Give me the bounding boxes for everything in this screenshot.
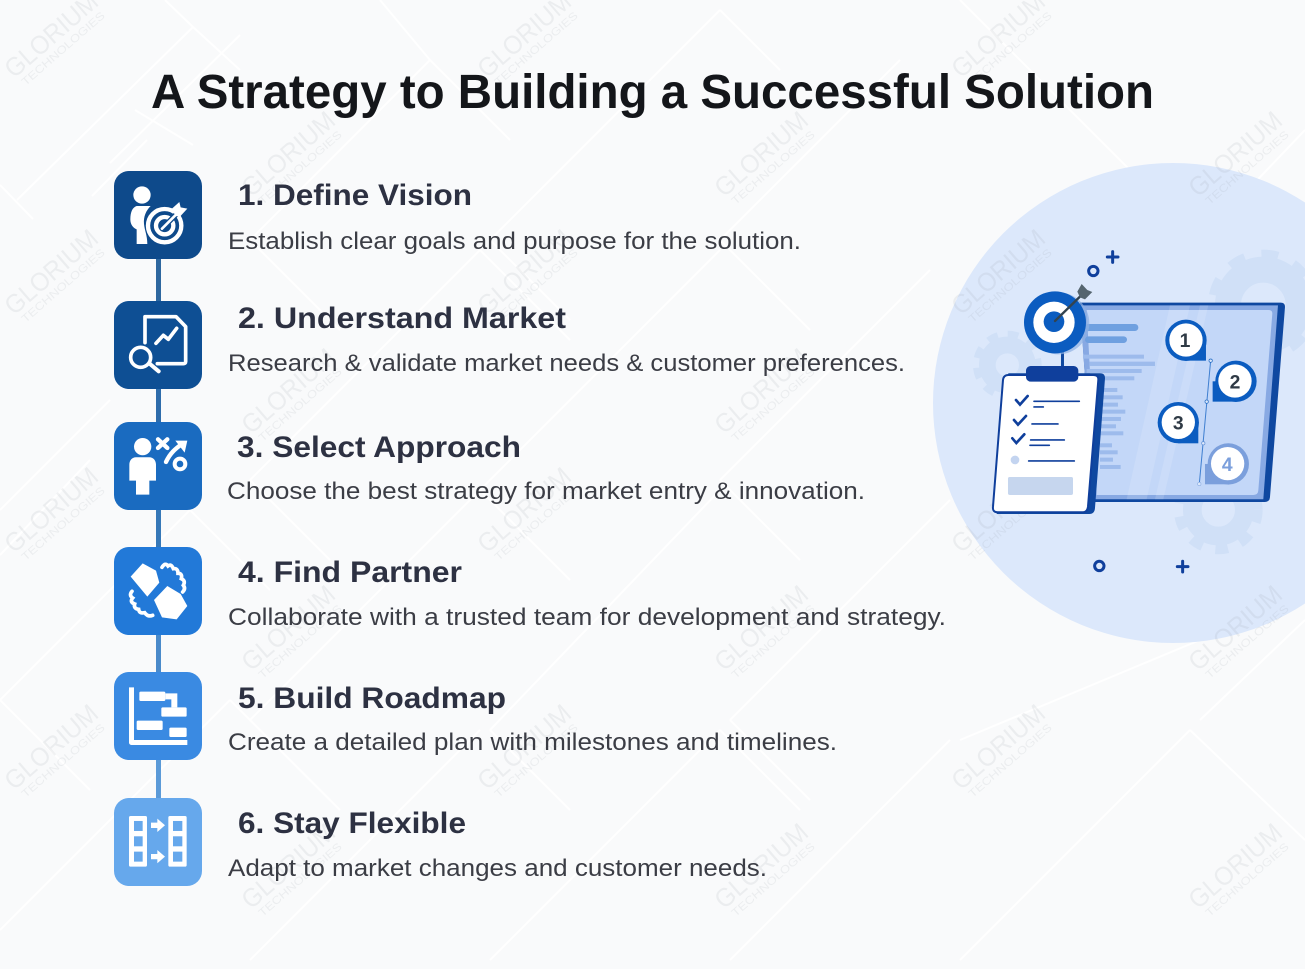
heading: 6. Stay Flexible bbox=[238, 807, 466, 840]
watermarks: GLORIUM bbox=[708, 105, 814, 203]
watermarks: TECHNOLOGIES bbox=[730, 129, 818, 207]
watermarks: TECHNOLOGIES bbox=[967, 247, 1055, 325]
icon: columns with arrows bbox=[114, 798, 202, 886]
pin 2: 2 bbox=[1230, 372, 1240, 393]
step 1: define vision bbox=[114, 171, 801, 259]
watermarks: TECHNOLOGIES bbox=[493, 10, 581, 88]
watermarks: GLORIUM bbox=[945, 223, 1051, 321]
description: Create a detailed plan with milestones and timelines. bbox=[228, 729, 837, 756]
watermarks: TECHNOLOGIES bbox=[20, 10, 108, 88]
watermarks: TECHNOLOGIES bbox=[493, 247, 581, 325]
watermarks: TECHNOLOGIES bbox=[257, 366, 345, 444]
icon: chart with magnifier bbox=[114, 301, 202, 389]
board bbox=[1080, 303, 1285, 502]
step 2: understand market bbox=[114, 301, 905, 389]
watermarks: GLORIUM bbox=[708, 579, 814, 677]
watermarks: GLORIUM bbox=[708, 817, 814, 915]
target with arrow bbox=[1024, 284, 1092, 368]
pin 3: 3 bbox=[1173, 414, 1184, 435]
decorative markers bbox=[1089, 252, 1188, 572]
illustration: strategy board, target and checklist bbox=[977, 252, 1305, 572]
watermarks: GLORIUM bbox=[471, 461, 577, 559]
pin 1: 1 bbox=[1180, 331, 1191, 352]
description: Research & validate market needs & customer preferences. bbox=[228, 350, 905, 377]
description: Establish clear goals and purpose for the solution. bbox=[228, 228, 801, 255]
watermarks: TECHNOLOGIES bbox=[730, 366, 818, 444]
pin 2 bbox=[1213, 361, 1257, 402]
watermarks: TECHNOLOGIES bbox=[730, 841, 818, 919]
step 4: find partner bbox=[114, 547, 946, 635]
watermarks: TECHNOLOGIES bbox=[1204, 841, 1292, 919]
watermarks: GLORIUM bbox=[235, 817, 341, 915]
watermarks: GLORIUM bbox=[235, 105, 341, 203]
pin 4: 4 bbox=[1222, 455, 1233, 476]
watermarks: TECHNOLOGIES bbox=[1204, 129, 1292, 207]
heading: 5. Build Roadmap bbox=[238, 682, 506, 715]
watermarks: TECHNOLOGIES bbox=[967, 485, 1055, 563]
watermarks: TECHNOLOGIES bbox=[257, 603, 345, 681]
watermarks: TECHNOLOGIES bbox=[730, 603, 818, 681]
step 6: stay flexible bbox=[114, 798, 767, 886]
watermarks: TECHNOLOGIES bbox=[967, 722, 1055, 800]
watermarks: GLORIUM bbox=[0, 461, 104, 559]
watermarks: TECHNOLOGIES bbox=[493, 485, 581, 563]
heading: 2. Understand Market bbox=[238, 302, 566, 335]
watermarks: GLORIUM bbox=[235, 342, 341, 440]
watermarks: TECHNOLOGIES bbox=[967, 10, 1055, 88]
pin 3 bbox=[1158, 402, 1199, 443]
watermarks: TECHNOLOGIES bbox=[20, 722, 108, 800]
watermarks: GLORIUM bbox=[1182, 579, 1288, 677]
timeline connector bbox=[156, 255, 161, 801]
watermarks: GLORIUM bbox=[1182, 105, 1288, 203]
step 3: select approach bbox=[114, 422, 865, 510]
pin 4 bbox=[1205, 443, 1249, 485]
heading: 1. Define Vision bbox=[238, 179, 472, 212]
heading: 4. Find Partner bbox=[238, 556, 462, 589]
watermarks: GLORIUM bbox=[708, 342, 814, 440]
watermarks: GLORIUM bbox=[235, 579, 341, 677]
watermarks: GLORIUM bbox=[471, 223, 577, 321]
icon: person with target bbox=[114, 171, 202, 259]
clipboard checklist bbox=[993, 366, 1105, 514]
pin 1 bbox=[1165, 320, 1207, 361]
roadmap line bbox=[1198, 359, 1212, 486]
watermarks: TECHNOLOGIES bbox=[1204, 603, 1292, 681]
heading: 3. Select Approach bbox=[237, 431, 521, 464]
description: Choose the best strategy for market entry & innovation. bbox=[227, 478, 865, 505]
watermarks: TECHNOLOGIES bbox=[20, 485, 108, 563]
icon: gantt chart bbox=[114, 672, 202, 760]
icon: handshake bbox=[114, 547, 202, 635]
step 5: build roadmap bbox=[114, 672, 837, 760]
watermarks: GLORIUM bbox=[0, 223, 104, 321]
background gears bbox=[977, 255, 1305, 549]
watermarks: TECHNOLOGIES bbox=[257, 841, 345, 919]
watermarks: GLORIUM bbox=[471, 698, 577, 796]
watermarks: TECHNOLOGIES bbox=[493, 722, 581, 800]
watermarks: GLORIUM bbox=[1182, 817, 1288, 915]
watermarks: GLORIUM bbox=[0, 698, 104, 796]
watermarks: GLORIUM bbox=[945, 698, 1051, 796]
board text lines bbox=[1085, 324, 1138, 343]
illustration background circle bbox=[933, 163, 1305, 643]
watermarks: GLORIUM bbox=[945, 461, 1051, 559]
title: A Strategy to Building a Successful Solution bbox=[151, 66, 1154, 119]
description: Adapt to market changes and customer needs. bbox=[228, 855, 767, 882]
icon: person with strategy marks bbox=[114, 422, 202, 510]
watermarks: TECHNOLOGIES bbox=[20, 247, 108, 325]
watermarks: TECHNOLOGIES bbox=[257, 129, 345, 207]
description: Collaborate with a trusted team for development and strategy. bbox=[228, 604, 946, 631]
